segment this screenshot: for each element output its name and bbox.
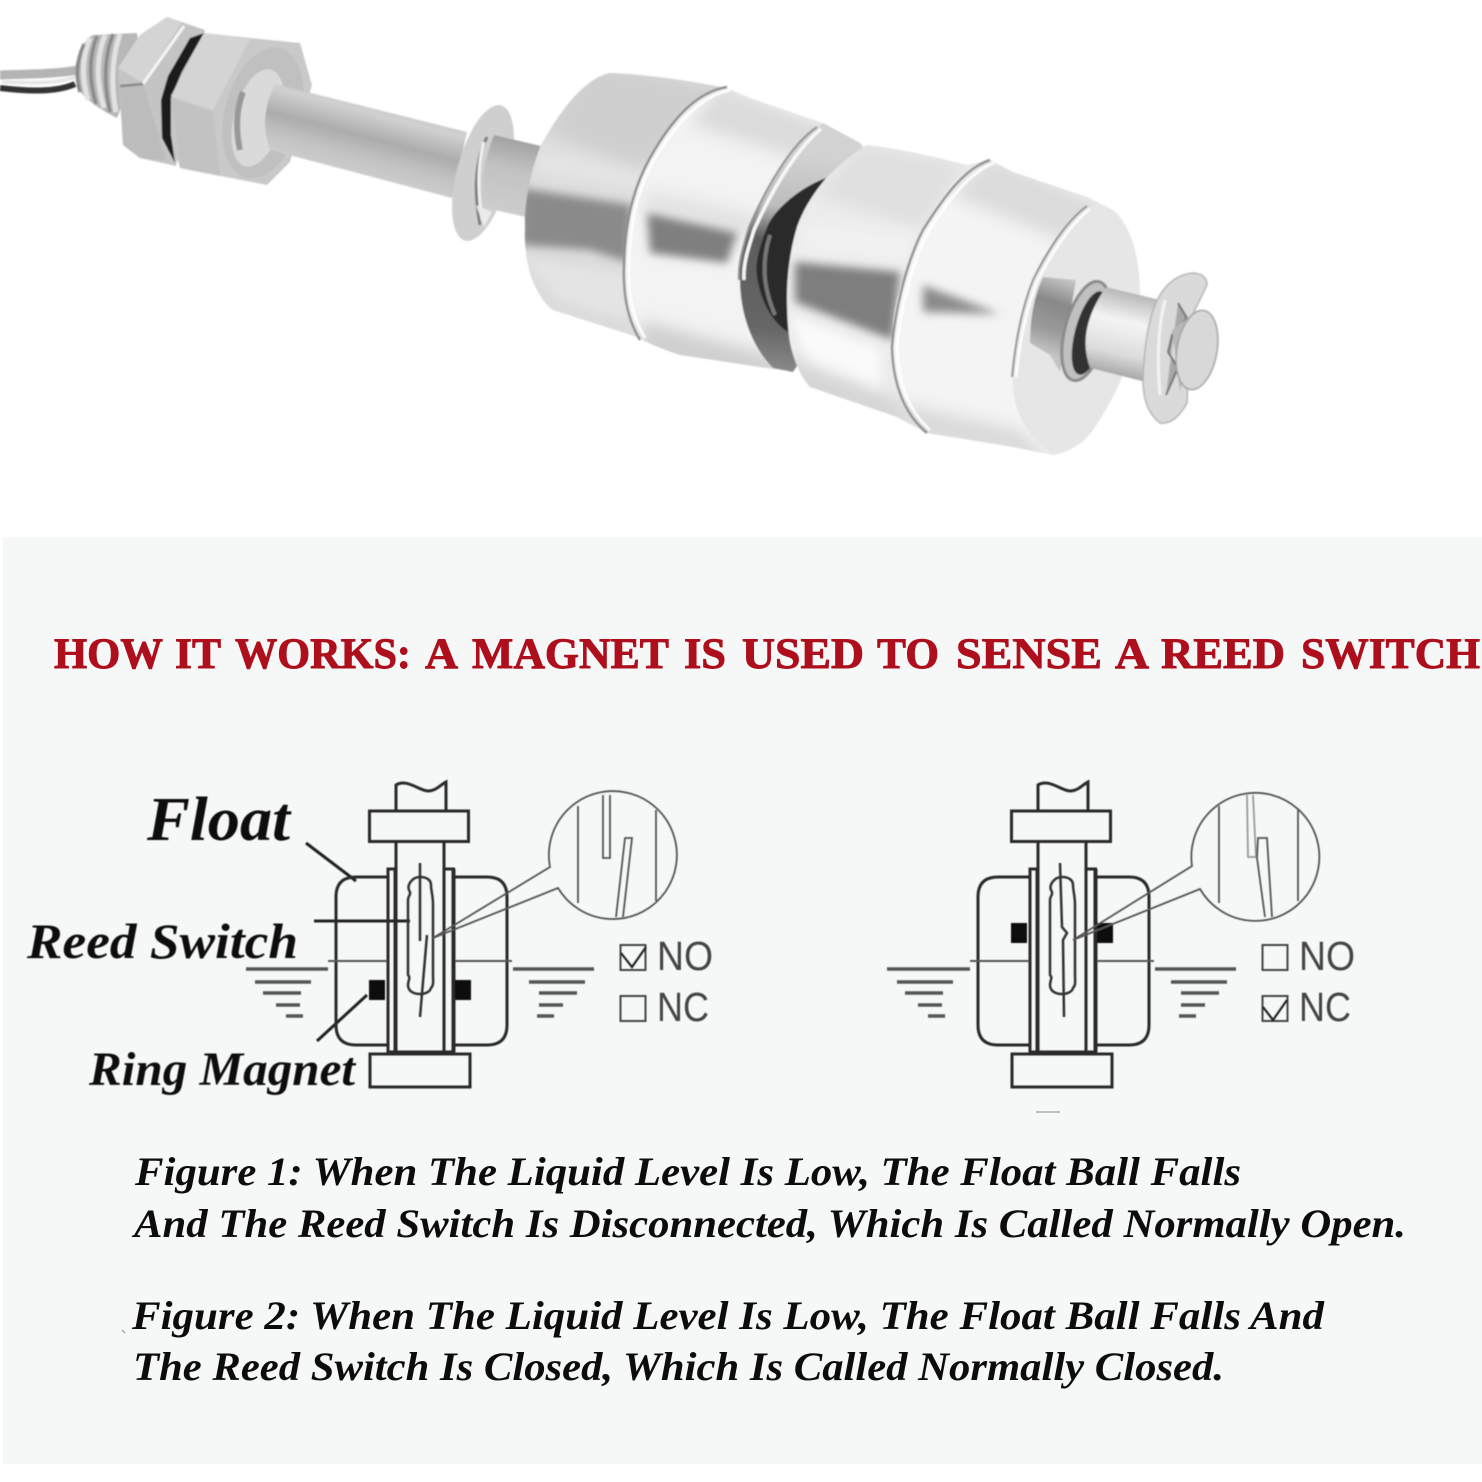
heading: MAGNET xyxy=(472,631,669,678)
checkbox: NC checked xyxy=(1262,984,1351,1030)
water level marks xyxy=(246,969,594,1016)
end face hub xyxy=(1030,276,1119,386)
text block: figure 2 xyxy=(131,1293,1325,1389)
upper washer xyxy=(440,99,526,247)
text block: figure 1: Figure 1: When The Liquid Level Is Low, The Float Ball Falls xyxy=(134,1149,1241,1194)
heading: IT xyxy=(175,631,221,678)
float two, ring highlights xyxy=(892,160,1090,433)
rod past washer xyxy=(482,135,545,218)
checkbox: NO unchecked: NO xyxy=(1299,933,1355,979)
float two, left section shading xyxy=(788,147,956,427)
checkbox: NC unchecked xyxy=(620,984,709,1030)
float two, body xyxy=(787,145,1140,455)
magnified contacts callout xyxy=(1073,793,1319,940)
heading xyxy=(54,631,1480,678)
lower rod xyxy=(1086,287,1160,382)
diagram: figure 1 normally open xyxy=(26,782,713,1096)
nut two xyxy=(171,33,317,188)
ring magnets xyxy=(369,980,471,1000)
reed capsule xyxy=(408,863,433,1017)
upper rod xyxy=(265,84,467,198)
checkbox: NC unchecked: NC xyxy=(657,984,709,1030)
label: float: Float xyxy=(146,786,292,854)
water line xyxy=(970,960,1154,962)
stray marks from the source image xyxy=(122,1112,1060,1333)
panel: how it works xyxy=(3,537,1482,1464)
float one, ring highlights xyxy=(624,87,821,340)
float body xyxy=(978,877,1149,1045)
photo: stainless steel double float level switch xyxy=(0,17,1224,470)
water level marks xyxy=(887,969,1236,1016)
checkbox: NO checked: NO xyxy=(657,933,713,979)
text block: figure 1: And The Reed Switch Is Disconnected, Which Is Called Normally Open. xyxy=(131,1201,1406,1246)
heading: TO xyxy=(877,631,939,678)
stem and flanges xyxy=(1012,782,1112,1087)
heading: IS xyxy=(684,631,726,678)
float two, end face xyxy=(1013,204,1140,455)
nut gap xyxy=(161,33,204,163)
reed capsule xyxy=(1050,863,1075,1017)
checkbox: NC checked: NC xyxy=(1299,984,1351,1030)
heading: SWITCH xyxy=(1301,631,1480,678)
float one, hollow end xyxy=(740,123,873,372)
ring magnets xyxy=(1011,923,1113,943)
label: reed switch: Reed Switch xyxy=(26,913,298,969)
label: ring magnet: Ring Magnet xyxy=(88,1043,357,1096)
stem and flanges xyxy=(370,782,470,1087)
heading: A xyxy=(425,631,458,678)
wires xyxy=(0,70,78,91)
float body xyxy=(336,877,507,1045)
text block: figure 2: The Reed Switch Is Closed, Which Is Called Normally Closed. xyxy=(133,1344,1224,1389)
heading: A xyxy=(1115,631,1149,678)
heading: WORKS: xyxy=(235,631,411,678)
float one, left section xyxy=(524,72,720,337)
text block: figure 1 xyxy=(131,1149,1406,1246)
heading: REED xyxy=(1161,631,1285,678)
water line xyxy=(328,960,512,962)
heading: SENSE xyxy=(956,631,1102,678)
threaded end xyxy=(75,33,140,118)
heading: HOW xyxy=(54,631,163,678)
checkbox: NO unchecked xyxy=(1262,933,1355,979)
magnified contacts callout xyxy=(433,791,677,938)
leader lines xyxy=(306,843,410,1041)
heading: USED xyxy=(742,631,864,678)
lower washer and screw head xyxy=(1143,273,1224,423)
text block: figure 2: Figure 2: When The Liquid Level Is Low, The Float Ball Falls And xyxy=(131,1293,1325,1338)
diagram: figure 2 normally closed xyxy=(887,782,1355,1087)
checkbox: NO checked xyxy=(620,933,713,979)
float two, right section shading xyxy=(910,164,1093,451)
float one, right section xyxy=(626,88,822,370)
nut one xyxy=(118,17,205,166)
